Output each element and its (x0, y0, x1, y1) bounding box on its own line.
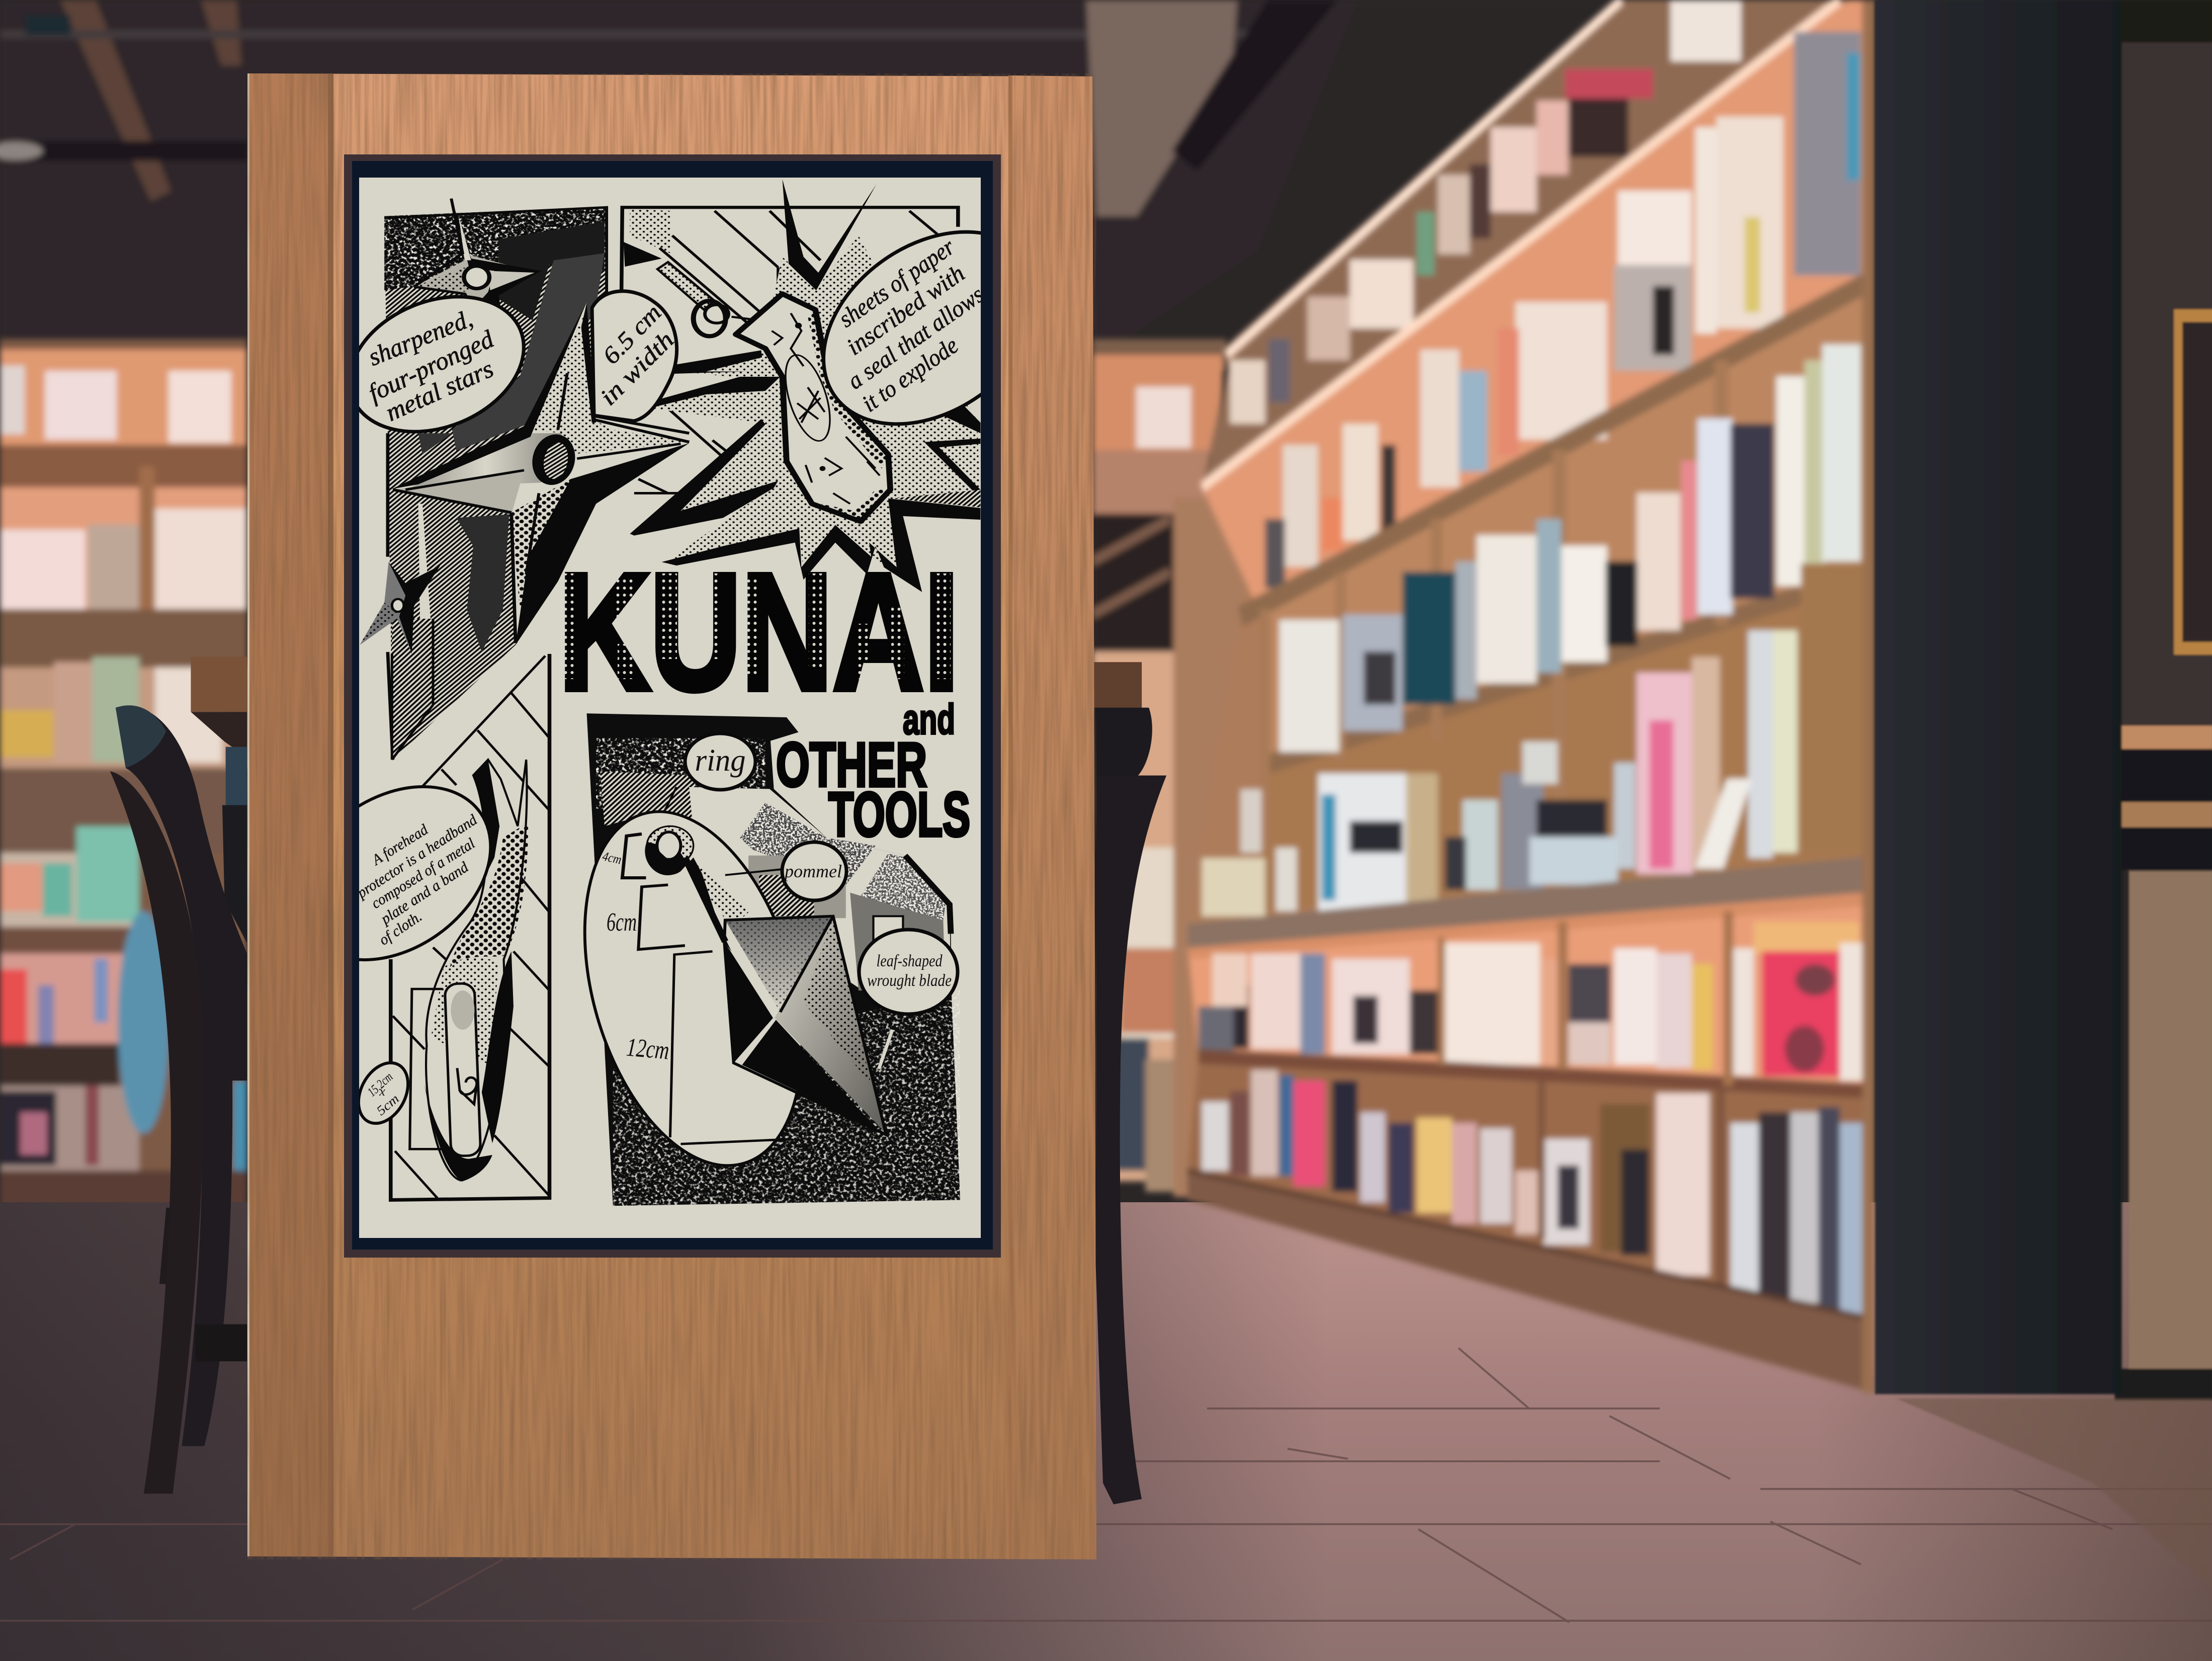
callout: plate size: x (379, 1084, 385, 1099)
callout: forehead protector: A forehead (368, 821, 431, 869)
background: dark column and right wall (1875, 0, 2212, 1589)
background: left bookshelves (0, 339, 247, 1208)
gold framed picture (2178, 316, 2212, 648)
callout: metal stars: four-pronged (364, 324, 498, 407)
left chair and table (110, 657, 247, 1493)
heading: and other tools: and (903, 696, 955, 743)
kunai dimension labels: 4cm (601, 849, 623, 867)
wooden display panel (247, 73, 1096, 1559)
callout: metal stars: sharpened, (364, 304, 476, 371)
callout: forehead protector (264, 751, 524, 995)
base plinth (1187, 1171, 1875, 1393)
counter (2115, 726, 2212, 749)
icon: large shuriken (392, 302, 689, 645)
callout: forehead protector: protector is a headband (354, 811, 480, 902)
heading: and other tools (776, 696, 970, 850)
poster frame (344, 154, 1001, 1258)
metal plate (445, 983, 481, 1156)
callout: forehead protector: of cloth. (376, 908, 425, 949)
large white ellipse (548, 791, 838, 1187)
callout: width: in width (595, 326, 679, 410)
panel: lower-left forehead protector frame (391, 599, 549, 1200)
background: centre back wall and pillar (1092, 339, 1261, 1197)
callout: paper bomb: inscribed with (842, 260, 970, 361)
row B books (1794, 32, 1861, 276)
right chair and table (1092, 662, 1166, 1505)
callout: leaf-shaped blade: wrought blade (867, 971, 952, 990)
main shelf (1187, 856, 1871, 948)
icon: small shuriken (360, 562, 440, 654)
kunai blade (725, 916, 833, 1012)
paper bomb tag (736, 294, 890, 522)
explosion halftone body (630, 235, 980, 574)
callout: plate size: 15.2cm (365, 1069, 396, 1099)
panel: shuriken scene (384, 207, 607, 760)
heading: and other tools: TOOLS (828, 780, 970, 850)
row F books (1731, 1123, 1759, 1292)
explosion spikes (782, 179, 876, 290)
icon: top shuriken (414, 199, 541, 361)
callout: pommel (782, 842, 846, 900)
callout: ring (685, 733, 755, 790)
callout: forehead protector: plate and a band (377, 859, 472, 928)
kunai dimension labels: 12cm (625, 1033, 670, 1065)
callout: metal stars: metal stars (381, 354, 497, 427)
callout: paper bomb: sheets of paper (834, 233, 960, 333)
kunai grip (689, 854, 748, 928)
poster (359, 178, 981, 1238)
callout: leaf-shaped blade: leaf-shaped (876, 952, 943, 970)
kunai dimension labels (601, 849, 670, 1065)
callout: width: 6.5 cm (598, 299, 666, 369)
heading: and other tools: OTHER (776, 730, 927, 800)
callout: paper bomb: a seal that allows (842, 281, 989, 394)
title: KUNAI: KUNAI (559, 539, 959, 724)
callout: paper bomb: it to explode (857, 332, 963, 417)
callout: plate size (349, 1054, 418, 1132)
size bracket (410, 989, 453, 1149)
callout: leaf-shaped blade (859, 930, 958, 1014)
row D books (1801, 563, 1863, 852)
row C books (1776, 376, 1805, 586)
row A books (1670, 0, 1741, 61)
panel: kunai diagram (548, 713, 960, 1206)
kunai pommel ring (645, 826, 731, 951)
shelf boards (1240, 284, 1864, 765)
paper background (359, 178, 981, 1238)
background: bookshelf with books (1187, 0, 1875, 1393)
kunai handle in background (657, 262, 715, 310)
row E books (1727, 948, 1754, 1075)
callout: ring: ring (695, 743, 745, 778)
lit strips (1226, 0, 1621, 355)
dimension brackets (622, 834, 646, 878)
panel: explosion and paper bomb (592, 179, 980, 592)
callout: forehead protector: composed of a metal (368, 835, 478, 912)
forehead protector cloth (426, 760, 527, 1181)
buildings and roofs (740, 803, 876, 885)
kunai dimension labels: 6cm (607, 908, 637, 937)
callout: paper bomb (787, 192, 1076, 464)
callout: pommel: pommel (783, 861, 842, 881)
plate symbol (457, 1068, 477, 1104)
background: floor (0, 1202, 2212, 1661)
callout: plate size: 5cm (374, 1091, 402, 1118)
callout: width (592, 291, 679, 421)
shelf carcass (1187, 0, 1875, 1393)
callout: metal stars (329, 272, 544, 456)
